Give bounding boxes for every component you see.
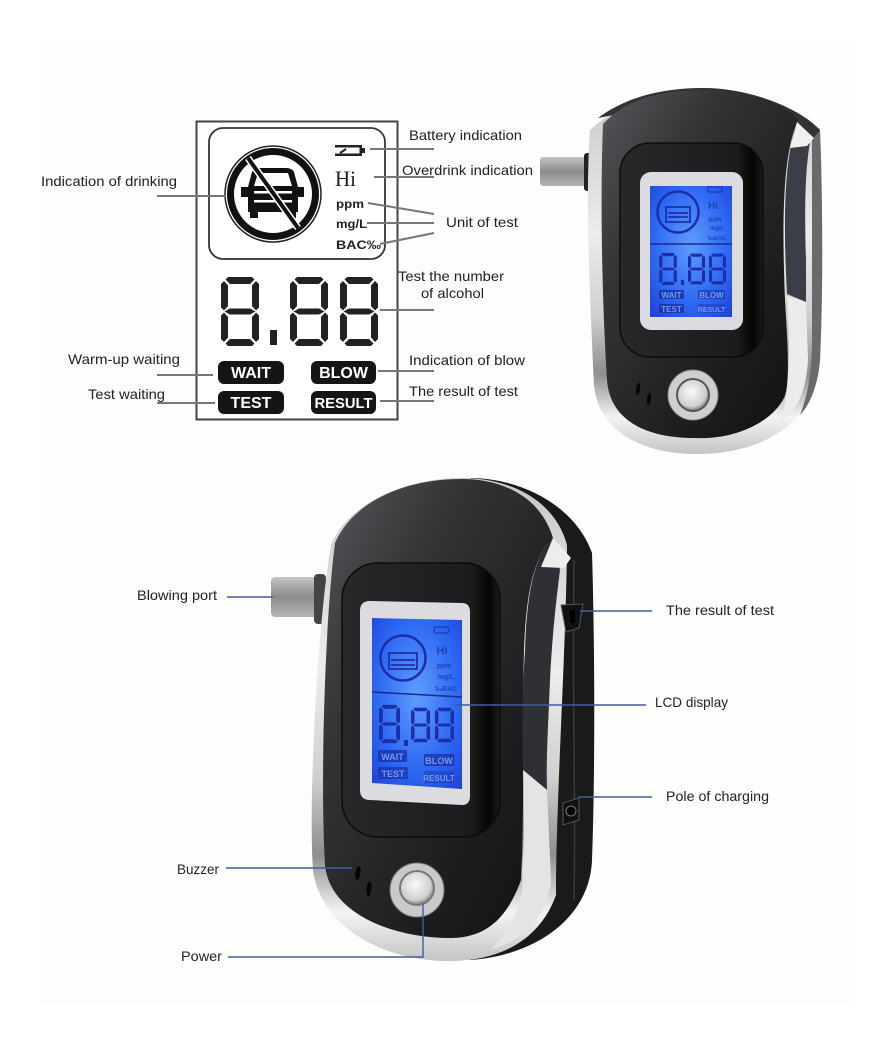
blue screen: ppm [437, 663, 451, 670]
blue screen: WAIT [662, 291, 682, 300]
blue screen: mg/L [438, 674, 455, 681]
blue screen: BLOW [699, 291, 724, 300]
blue screen: RESULT [698, 307, 726, 314]
blue screen: TEST [381, 769, 405, 779]
blowing port [271, 574, 326, 624]
label: battery: Battery indication [409, 127, 522, 143]
label: warm-up: Warm-up waiting [68, 351, 180, 367]
LCD outer frame [196, 122, 398, 420]
blowing port [540, 153, 591, 191]
label: LCD display: LCD display [655, 694, 728, 710]
label: drinking: Indication of drinking [41, 173, 177, 189]
illustration: large breathalyzer [271, 478, 594, 961]
label: result of test: The result of test [666, 602, 774, 618]
seven-segment digits 8.88 [221, 277, 378, 346]
display bezel [360, 601, 470, 805]
illustration: small breathalyzer [540, 88, 822, 454]
Hi indicator: Hi [335, 166, 356, 191]
label: number of alcohol [398, 268, 504, 301]
display recess [342, 563, 500, 837]
buzzer holes [635, 383, 652, 405]
charging and switch ports [561, 604, 583, 825]
RESULT pill [311, 391, 376, 414]
right chrome band [523, 538, 560, 790]
label: result: The result of test [409, 383, 518, 399]
body chrome [588, 88, 822, 454]
icon: battery [335, 145, 365, 156]
label: number of alcohol: of alcohol [421, 285, 484, 301]
black face [323, 479, 553, 938]
WAIT pill: WAIT [231, 365, 271, 382]
unit labels: BAC‰ [336, 238, 381, 252]
unit labels [336, 197, 381, 252]
blue screen: Hi [436, 645, 448, 657]
unit labels: mg/L [336, 217, 367, 231]
blue screen: TEST [661, 305, 682, 314]
side black body [470, 478, 594, 960]
label: blow: Indication of blow [409, 352, 526, 368]
label: pole of charging: Pole of charging [666, 788, 769, 804]
display recess [620, 143, 763, 357]
panel: LCD legend diagram [196, 122, 398, 420]
label: number of alcohol: Test the number [398, 268, 504, 284]
LCD icon panel [209, 128, 385, 259]
TEST pill [218, 391, 284, 414]
blue screen: ‰BAC [435, 686, 457, 693]
blue screen: ppm [709, 217, 721, 223]
blue screen: Hi [708, 201, 718, 212]
leader lines: LCD legend [157, 149, 434, 403]
leader lines: device parts [226, 597, 652, 957]
blue screen [372, 618, 462, 789]
label: unit: Unit of test [446, 214, 518, 230]
label: blowing port: Blowing port [137, 587, 217, 603]
black face [602, 90, 798, 438]
RESULT pill: RESULT [314, 395, 372, 412]
blue screen: mg/L [710, 226, 724, 232]
display bezel [640, 172, 743, 330]
BLOW pill: BLOW [319, 365, 369, 382]
power button [668, 370, 718, 420]
blue screen: ‰BAC [708, 236, 727, 242]
power button [390, 863, 444, 917]
label: overdrink: Overdrink indication [402, 162, 533, 178]
label: power: Power [181, 948, 222, 964]
label: buzzer: Buzzer [177, 861, 219, 877]
icon: no drinking and driving car [225, 146, 321, 242]
BLOW pill [311, 361, 376, 384]
device part labels [137, 587, 774, 964]
label: test waiting: Test waiting [88, 386, 165, 402]
right chrome band [785, 122, 810, 302]
blue screen: RESULT [423, 774, 455, 783]
top shell and right edge [598, 88, 820, 142]
body chrome [312, 478, 567, 961]
buzzer holes [355, 866, 372, 896]
TEST pill: TEST [231, 395, 272, 412]
blue screen: WAIT [381, 752, 404, 762]
blue screen [650, 186, 732, 317]
blue screen: BLOW [425, 756, 453, 766]
legend labels [41, 127, 533, 402]
unit labels: ppm [336, 197, 364, 211]
WAIT pill [218, 361, 284, 384]
